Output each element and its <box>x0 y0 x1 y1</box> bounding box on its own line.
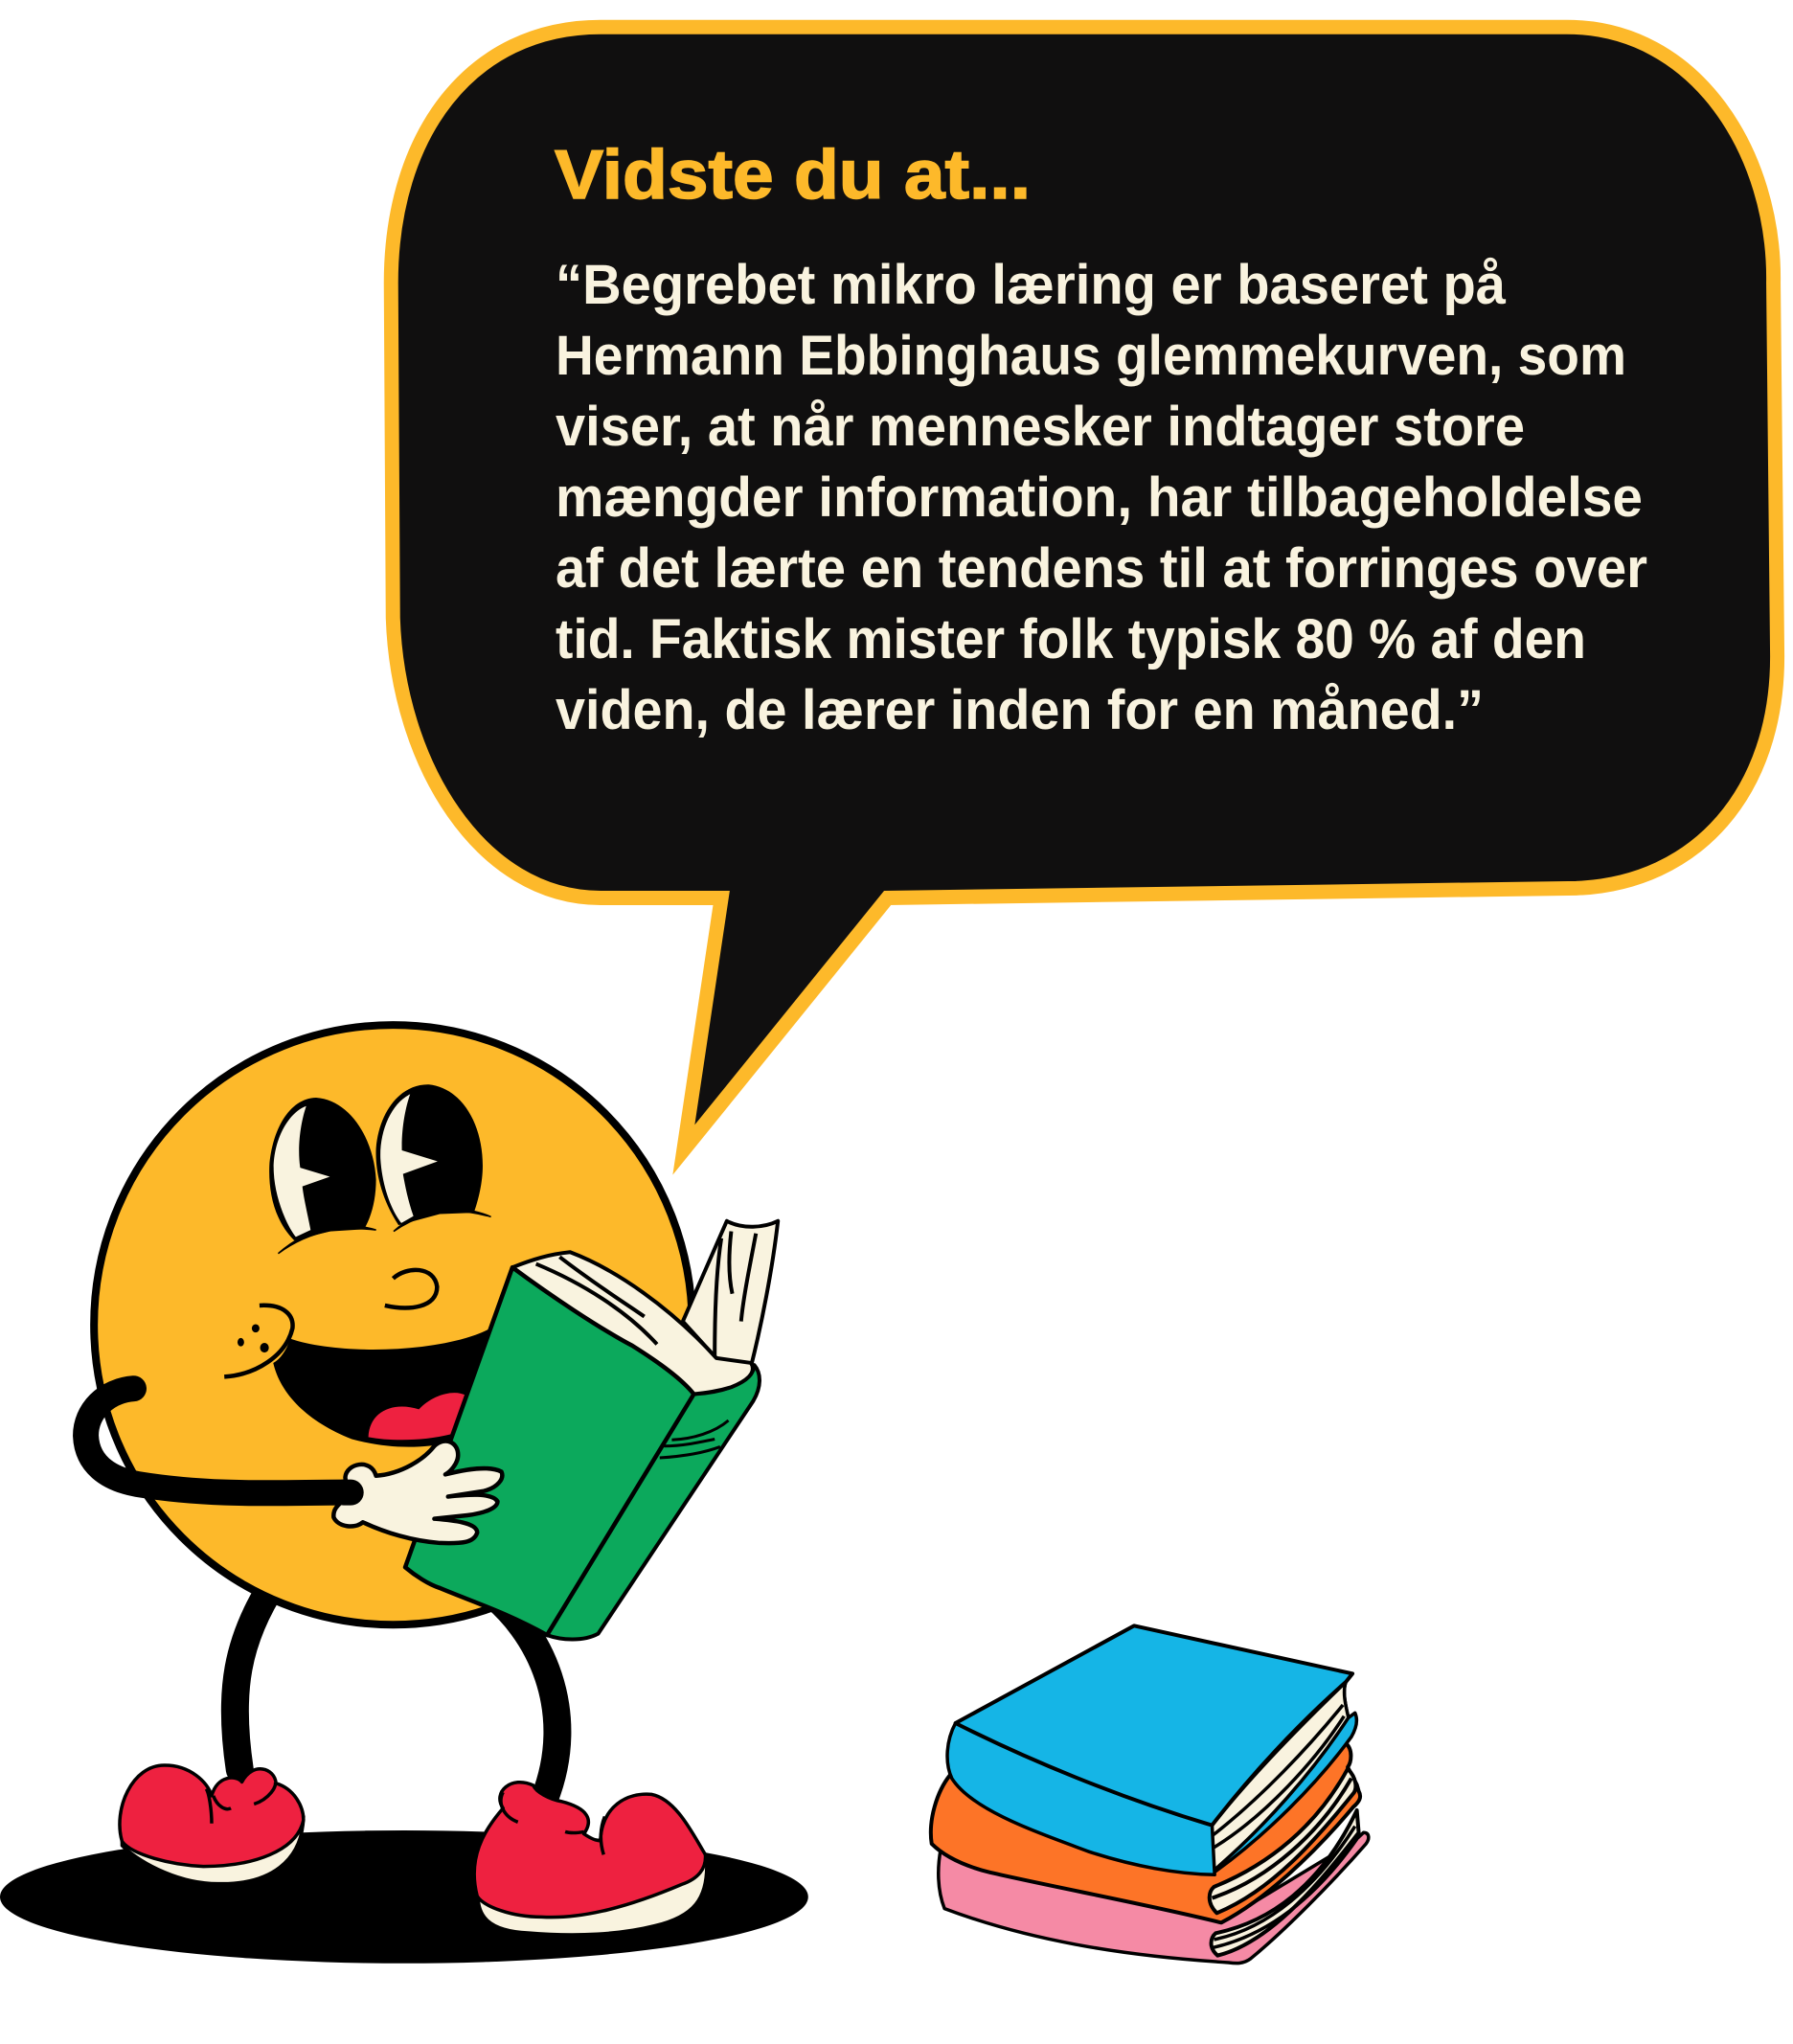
quote text: af det lærte en tendens til at forringes over <box>556 537 1647 600</box>
left shoe <box>120 1765 304 1884</box>
arm <box>86 1389 344 1493</box>
heading: Vidste du at... <box>555 137 1031 214</box>
tongue <box>369 1393 466 1440</box>
right shoe <box>474 1783 707 1935</box>
quote text: Hermann Ebbinghaus glemmekurven, som <box>556 325 1626 387</box>
hand <box>333 1441 502 1543</box>
open green book <box>405 1221 778 1640</box>
speech bubble <box>391 27 1778 1150</box>
quote text: viser, at når mennesker indtager store <box>556 396 1525 458</box>
legs <box>235 1581 557 1799</box>
nose <box>385 1270 437 1307</box>
stack of books <box>931 1625 1369 1964</box>
right eye <box>376 1084 491 1232</box>
quote text: “Begrebet mikro læring er baseret på <box>556 254 1507 316</box>
pink book <box>939 1810 1369 1964</box>
left eye <box>269 1098 376 1254</box>
quote text: viden, de lærer inden for en måned.” <box>556 679 1484 741</box>
quote text: mængder information, har tilbageholdelse <box>556 466 1643 529</box>
spine <box>547 1365 760 1640</box>
orange book <box>931 1743 1360 1922</box>
blue book <box>947 1625 1356 1874</box>
left page <box>512 1252 753 1394</box>
ground shadow <box>0 1830 808 1964</box>
quote text: tid. Faktisk mister folk typisk 80 % af den <box>556 608 1586 670</box>
round yellow body <box>94 1025 692 1624</box>
front cover <box>405 1267 693 1635</box>
open mouth <box>273 1329 490 1447</box>
quote text <box>556 254 1647 741</box>
character reading a book <box>0 1025 808 1964</box>
cheek and freckles <box>224 1306 293 1376</box>
right page <box>683 1221 778 1367</box>
